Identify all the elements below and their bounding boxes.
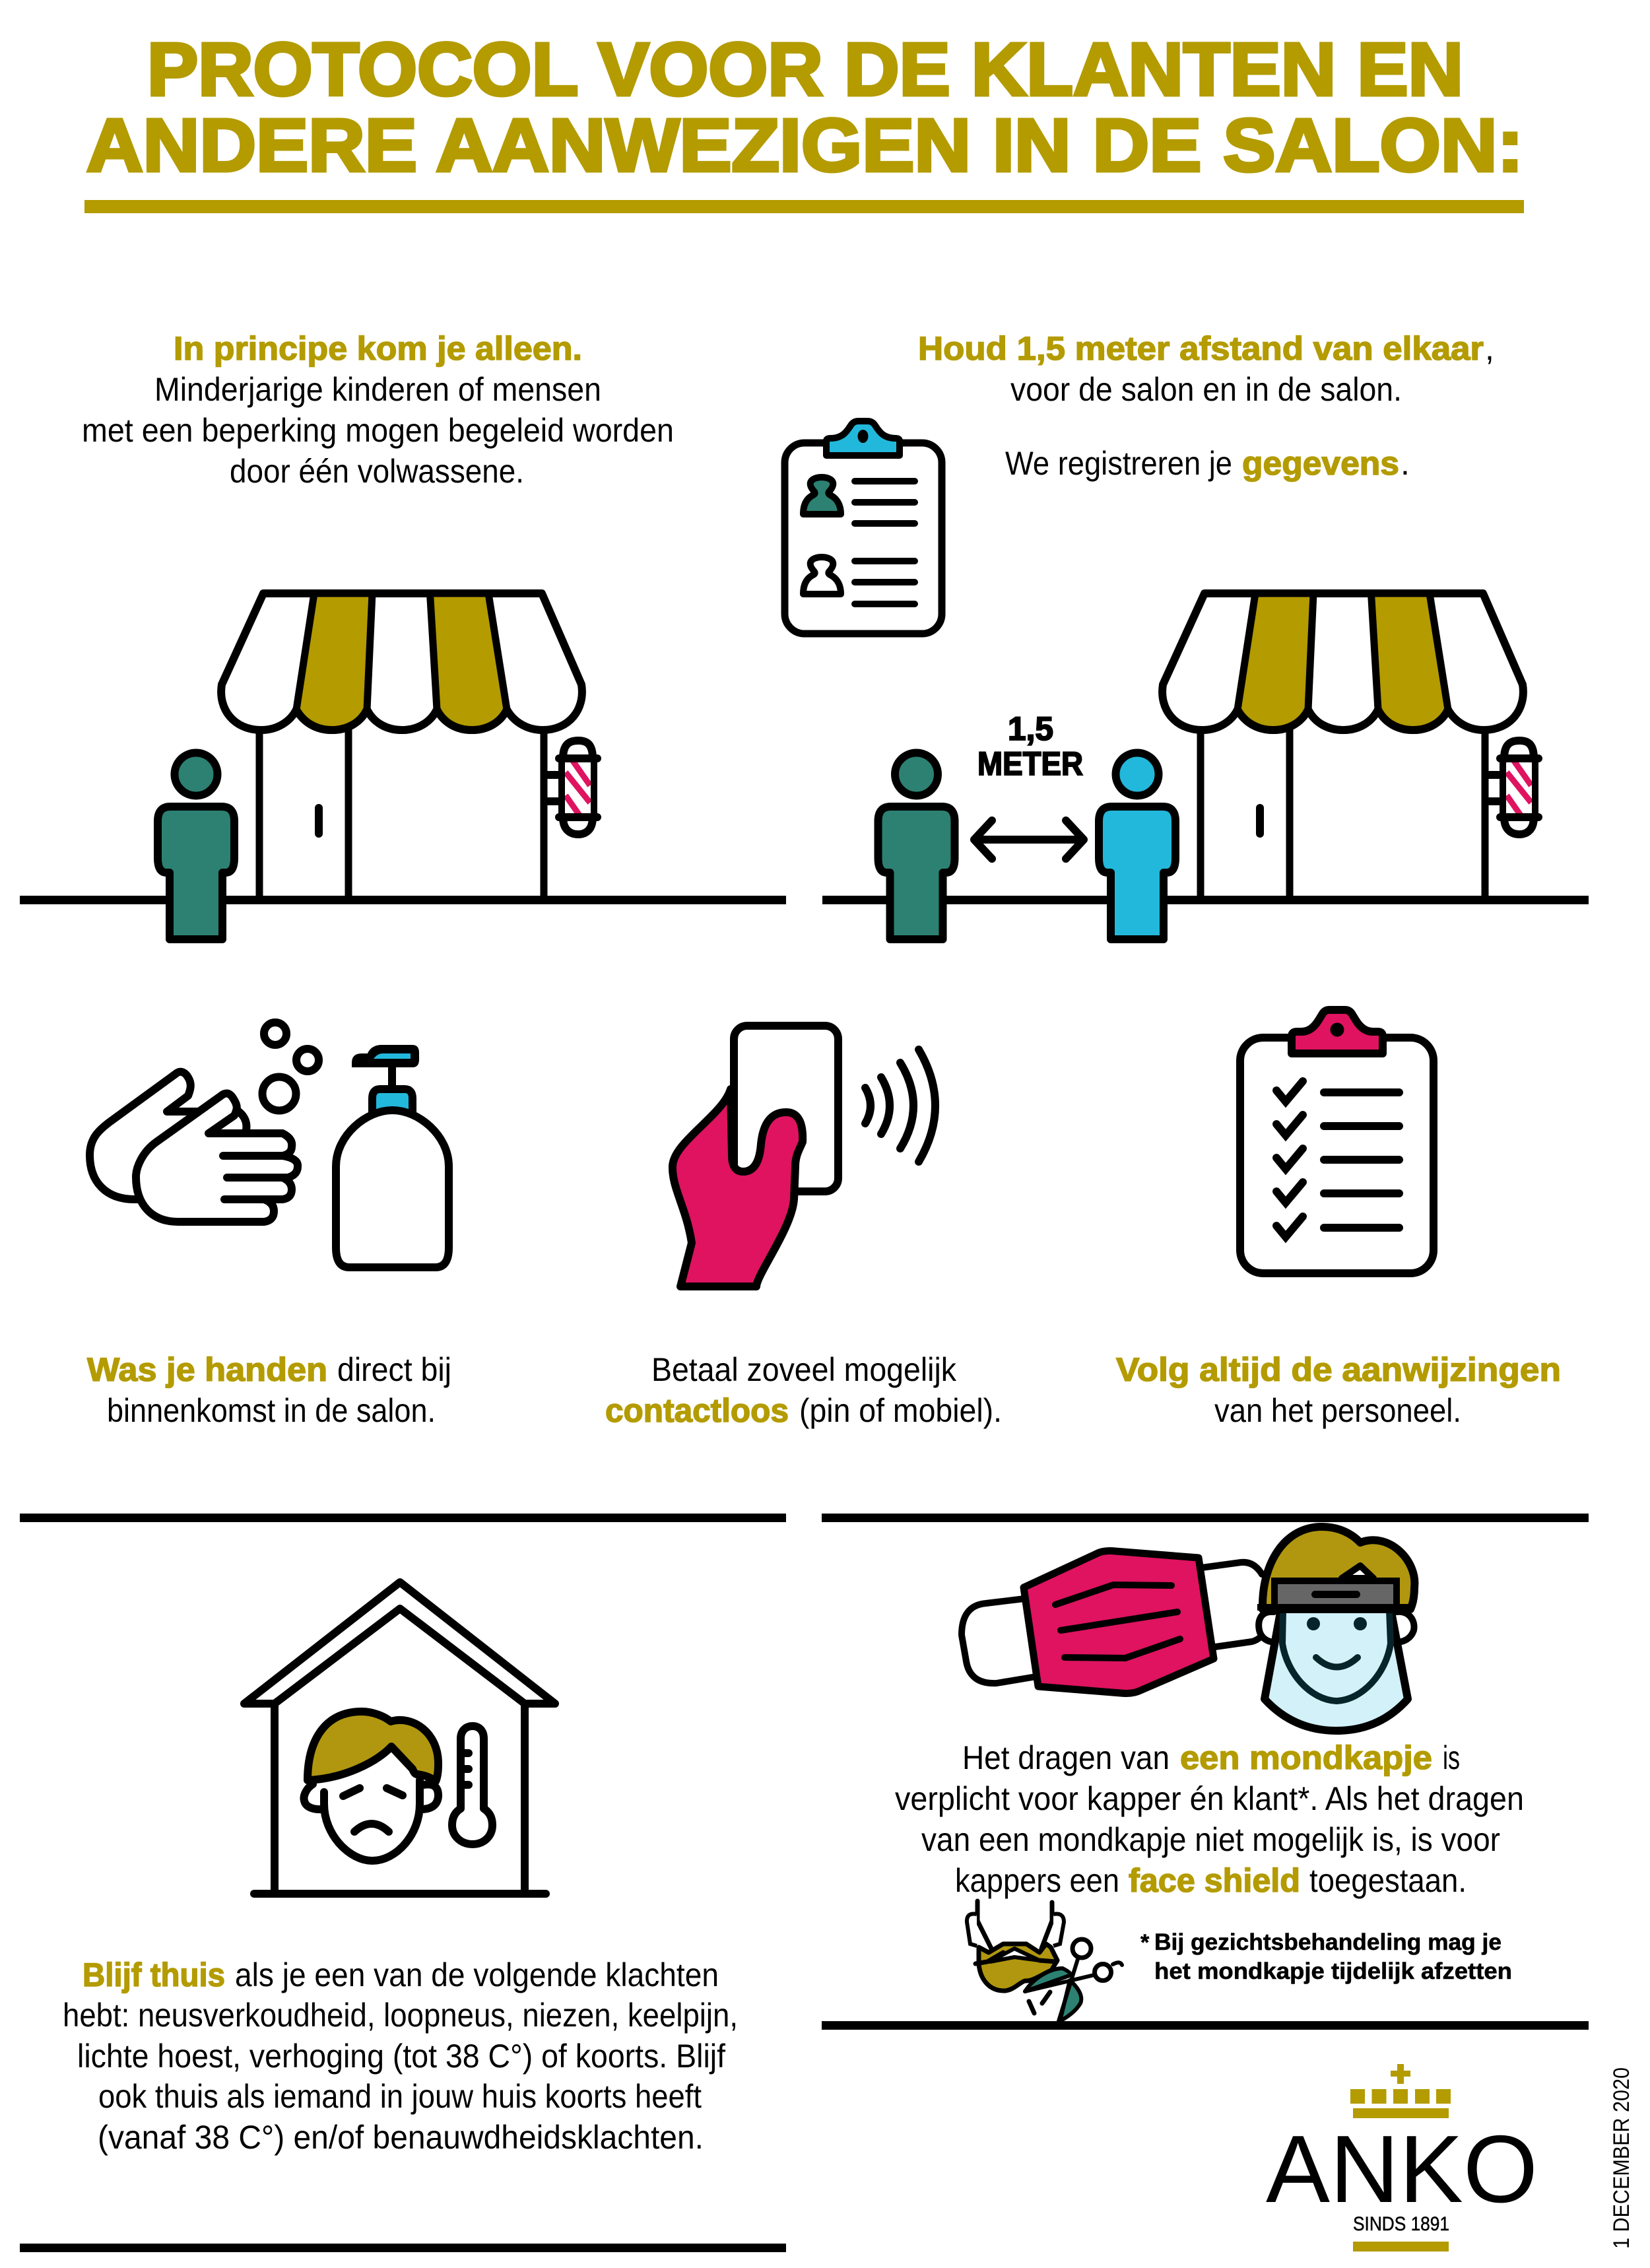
text: was je handen bbox=[87, 1351, 451, 1429]
footnote: het mondkapje tijdelijk afzetten bbox=[1154, 1958, 1512, 1984]
text: volg aanwijzingen: van het personeel. bbox=[1214, 1392, 1461, 1429]
text: blijf thuis: lichte hoest, verhoging (tot 38 C°) of koorts. Blijf bbox=[77, 2038, 725, 2075]
text: volg aanwijzingen bbox=[1116, 1351, 1561, 1429]
text: betaal contactloos: (pin of mobiel). bbox=[799, 1392, 1002, 1429]
icon: checklist clipboard bbox=[1240, 1010, 1434, 1273]
arrow: distance bbox=[974, 820, 1084, 859]
text block: houd afstand: We registreren je bbox=[1005, 445, 1232, 482]
footnote: * bbox=[1140, 1930, 1150, 1955]
icon: washing hands bbox=[90, 1022, 319, 1222]
text block: houd afstand: . bbox=[1401, 445, 1410, 482]
text: volg aanwijzingen: Volg altijd de aanwijzingen bbox=[1116, 1351, 1561, 1388]
text block: houd afstand: Houd 1,5 meter afstand van elkaar bbox=[918, 330, 1484, 367]
text: betaal contactloos: Betaal zoveel mogelijk bbox=[651, 1351, 957, 1388]
text: mondkapje: is bbox=[1443, 1739, 1460, 1776]
date: 1 DECEMBER 2020 bbox=[1609, 2067, 1634, 2249]
person: green left bbox=[158, 752, 234, 939]
text: was je handen: direct bij bbox=[337, 1351, 451, 1388]
crown bbox=[1350, 2064, 1451, 2118]
text: mondkapje: een mondkapje bbox=[1180, 1739, 1432, 1776]
text block: in principe kom je alleen bbox=[82, 330, 674, 490]
text: blijf thuis: Blijf thuis bbox=[82, 1956, 225, 1993]
text block: houd afstand: , bbox=[1485, 330, 1494, 367]
text: mondkapje: face shield bbox=[1129, 1862, 1300, 1899]
person: blue bbox=[1099, 752, 1175, 939]
text: was je handen: binnenkomst in de salon. bbox=[107, 1392, 436, 1429]
text block: houd afstand: gegevens bbox=[1242, 445, 1399, 482]
label: 1,5 meter: 1,5 bbox=[1008, 710, 1053, 747]
icon: registration clipboard bbox=[785, 421, 942, 634]
shop: left bbox=[221, 593, 597, 900]
text: mondkapje: toegestaan. bbox=[1309, 1862, 1467, 1899]
text: mondkapje: kappers een bbox=[955, 1862, 1119, 1899]
text: mondkapje: Het dragen van bbox=[962, 1739, 1170, 1776]
logo: ANKO bbox=[1266, 2064, 1538, 2251]
logo: ANKO: SINDS 1891 bbox=[1353, 2213, 1449, 2235]
text: blijf thuis: (vanaf 38 C°) en/of benauwdheidsklachten. bbox=[98, 2119, 704, 2156]
icon: hands and soap bbox=[90, 1022, 449, 1267]
text: betaal contactloos: contactloos bbox=[605, 1392, 789, 1429]
logo: ANKO: ANKO bbox=[1266, 2116, 1538, 2222]
text block: in principe kom je alleen: met een beperking mogen begeleid worden bbox=[82, 412, 674, 449]
icon: beard trim bbox=[967, 1901, 1122, 2021]
text: blijf thuis: ook thuis als iemand in jouw huis koorts heeft bbox=[98, 2078, 702, 2115]
icon: scissors bbox=[1025, 1939, 1122, 2021]
icon: face mask bbox=[962, 1551, 1262, 1694]
icon: soap bottle bbox=[336, 1045, 449, 1267]
title: ANDERE AANWEZIGEN IN DE SALON: bbox=[86, 104, 1523, 187]
text: mondkapje: verplicht voor kapper én klant*. Als het dragen bbox=[895, 1780, 1524, 1817]
icon: barber pole right bbox=[1488, 741, 1538, 834]
footnote bbox=[1140, 1929, 1512, 1984]
label: 1,5 meter: METER bbox=[977, 745, 1083, 782]
text block: in principe kom je alleen: door één volwassene. bbox=[230, 453, 524, 490]
text: blijf thuis: hebt: neusverkoudheid, loopneus, niezen, keelpijn, bbox=[63, 1997, 738, 2034]
title bbox=[86, 28, 1523, 187]
text block: in principe kom je alleen: In principe kom je alleen. bbox=[174, 330, 582, 367]
text: mondkapje: van een mondkapje niet mogelijk is, is voor bbox=[921, 1821, 1500, 1858]
text block: in principe kom je alleen: Minderjarige kinderen of mensen bbox=[154, 371, 601, 408]
text: was je handen: Was je handen bbox=[87, 1351, 327, 1388]
text: betaal contactloos bbox=[605, 1351, 1002, 1429]
shop: right bbox=[1162, 593, 1538, 900]
text block: houd afstand: voor de salon en in de salon. bbox=[1010, 371, 1402, 408]
person: green right bbox=[878, 752, 954, 939]
footnote: Bij gezichtsbehandeling mag je bbox=[1154, 1929, 1502, 1955]
icon: barber pole bbox=[547, 741, 597, 834]
icon: face shield person bbox=[1257, 1527, 1414, 1731]
icon: sick person at home bbox=[244, 1582, 555, 1894]
icon: contactless payment bbox=[673, 1026, 935, 1286]
title: PROTOCOL VOOR DE KLANTEN EN bbox=[147, 28, 1463, 111]
text: blijf thuis: als je een van de volgende klachten bbox=[235, 1956, 719, 1993]
text block: houd afstand bbox=[918, 330, 1494, 482]
label: 1,5 meter bbox=[977, 710, 1083, 782]
text: blijf thuis bbox=[63, 1956, 738, 2156]
text: mondkapje bbox=[895, 1739, 1524, 1899]
